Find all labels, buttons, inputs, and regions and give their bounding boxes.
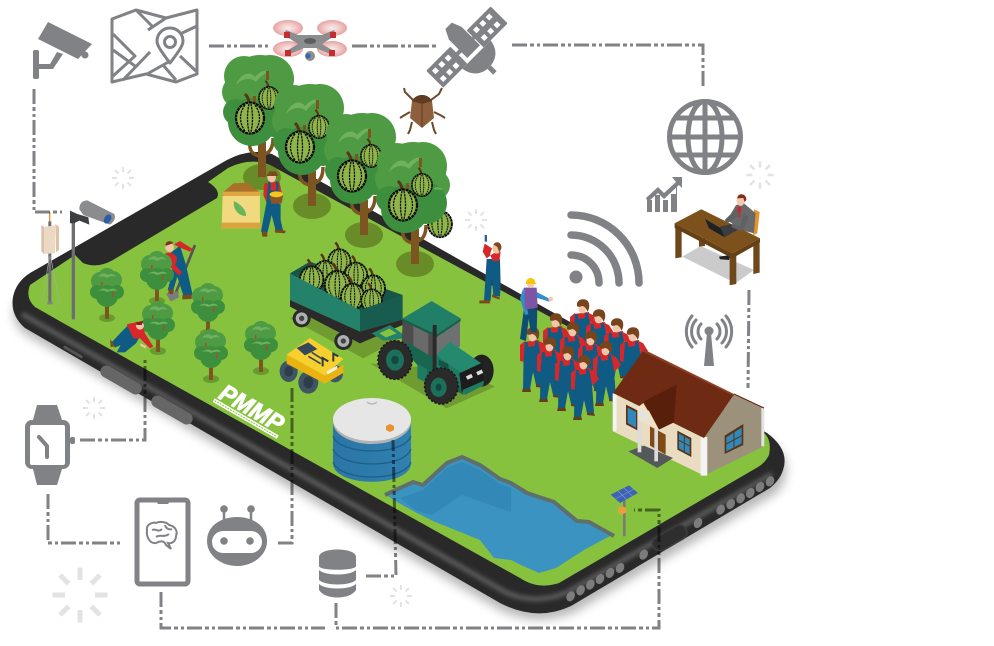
sensor box <box>386 424 394 432</box>
sparkle <box>390 585 412 607</box>
icon: pest beetle <box>400 88 445 134</box>
brain <box>147 522 177 549</box>
young trees <box>90 251 278 383</box>
office desk with manager <box>675 194 760 285</box>
fruit trailer <box>290 242 403 358</box>
tree 3 <box>324 113 399 248</box>
hitch <box>372 325 404 341</box>
worker <box>555 346 583 411</box>
rover robot <box>280 338 343 394</box>
robot to rover <box>278 388 292 543</box>
desk top <box>675 209 760 253</box>
tractor shadow <box>370 363 495 408</box>
manager <box>727 203 756 233</box>
farm house <box>613 350 764 476</box>
harvested fruits <box>300 242 385 312</box>
icon: security camera <box>33 22 92 79</box>
tree 4 <box>375 142 450 277</box>
steps <box>417 364 427 383</box>
phone outline <box>137 500 188 584</box>
durian tree row <box>222 55 452 277</box>
worker <box>537 337 565 402</box>
watch to kneeling worker <box>80 360 145 440</box>
camera on pole <box>70 200 115 319</box>
tank lid <box>333 398 411 441</box>
sparkle <box>465 209 487 231</box>
icon: smartwatch <box>25 405 75 485</box>
drone frame <box>284 30 336 54</box>
speaker grille and port <box>565 475 776 603</box>
front wheel <box>425 368 458 404</box>
tank rim <box>333 400 411 444</box>
trailer sides <box>290 273 360 332</box>
porch roof <box>644 385 677 430</box>
door <box>650 426 666 455</box>
ground shadow <box>290 300 403 358</box>
desk legs <box>675 227 760 285</box>
hood <box>437 342 482 374</box>
laptop <box>705 219 725 237</box>
icon: radio tower <box>686 316 732 366</box>
wall corners <box>701 437 707 476</box>
engine body <box>407 342 465 395</box>
satellite to globe <box>512 45 703 88</box>
young tree <box>141 301 175 355</box>
worker <box>593 341 621 406</box>
gable wall <box>704 395 764 476</box>
icon: map pin <box>112 10 197 82</box>
desk shadow <box>682 246 754 283</box>
sparkle <box>83 397 105 419</box>
icon: drone <box>273 20 347 61</box>
motors <box>284 32 336 56</box>
porch columns <box>638 420 641 452</box>
young tree <box>194 329 228 383</box>
side buttons <box>63 345 195 427</box>
phone notch <box>155 500 171 504</box>
water tank <box>333 398 411 482</box>
manager arms <box>725 208 749 231</box>
pond rim <box>385 457 614 536</box>
database to solar sensor <box>336 510 659 628</box>
worker <box>620 327 648 392</box>
icon: database <box>319 550 356 598</box>
worker crowd <box>520 299 648 420</box>
logo wordmark: PMMP <box>214 379 289 438</box>
connector lines <box>34 45 749 628</box>
frame highlight <box>22 314 772 599</box>
worker <box>586 309 614 374</box>
map to drone <box>209 44 268 48</box>
phone frame <box>12 152 785 613</box>
seed bag <box>221 183 261 228</box>
cab glass <box>402 320 437 365</box>
young tree <box>191 283 225 337</box>
young tree <box>244 321 278 375</box>
desk to house <box>748 290 749 388</box>
worker <box>560 322 588 387</box>
watch to phone <box>48 494 123 543</box>
worker digging with shovel <box>164 241 195 302</box>
rear wheel <box>378 341 412 379</box>
trailer box back <box>290 262 403 317</box>
tank rings <box>333 436 411 477</box>
cab roof <box>403 301 461 334</box>
sensor mast <box>41 212 59 304</box>
tree 1 <box>222 55 297 190</box>
front wall <box>613 393 704 476</box>
pond water <box>388 459 610 573</box>
worker photographing with phone <box>479 235 501 303</box>
sparkle <box>746 161 774 189</box>
large sparkle <box>52 568 108 622</box>
farmer with basket <box>261 171 286 237</box>
rotors <box>273 20 347 57</box>
icon: AI robot head <box>207 505 267 566</box>
worker <box>571 355 599 420</box>
kneeling worker <box>110 321 153 352</box>
young tree <box>90 268 124 322</box>
young tree <box>140 251 174 305</box>
icon: phone with AI brain <box>137 500 188 584</box>
camera to sensor <box>34 89 62 212</box>
tractor <box>370 301 495 408</box>
extra fruit <box>428 204 452 237</box>
decorative sparkles <box>52 161 774 622</box>
worker <box>520 327 548 392</box>
green screen <box>28 162 770 586</box>
pond shade <box>400 462 511 515</box>
icon: growth chart <box>646 177 682 212</box>
icon: wifi signal <box>570 215 639 284</box>
engineer with yellow helmet <box>520 278 553 341</box>
worker <box>604 318 632 383</box>
far wheel <box>470 355 494 387</box>
porch steps <box>628 446 673 468</box>
sparkle <box>112 167 134 189</box>
worker <box>578 331 606 396</box>
icon: satellite <box>415 0 526 106</box>
windows <box>626 405 637 430</box>
drone to satellite <box>352 44 438 48</box>
drone camera <box>305 51 315 61</box>
PMMP logo <box>213 378 290 439</box>
chair <box>753 209 760 235</box>
phone to database <box>161 592 325 628</box>
solar sensor <box>611 485 638 536</box>
pond <box>385 457 614 573</box>
logo underline <box>213 398 279 439</box>
tank body <box>333 420 411 482</box>
tree 2 <box>272 84 347 219</box>
trailer wheels <box>293 309 311 327</box>
main roof <box>613 350 734 438</box>
smartphone body <box>12 152 785 613</box>
phone shadow <box>14 166 787 620</box>
database to tank <box>366 440 396 576</box>
icon: globe <box>670 101 741 173</box>
worker <box>570 299 598 364</box>
hatch <box>367 402 377 404</box>
worker <box>543 313 571 378</box>
